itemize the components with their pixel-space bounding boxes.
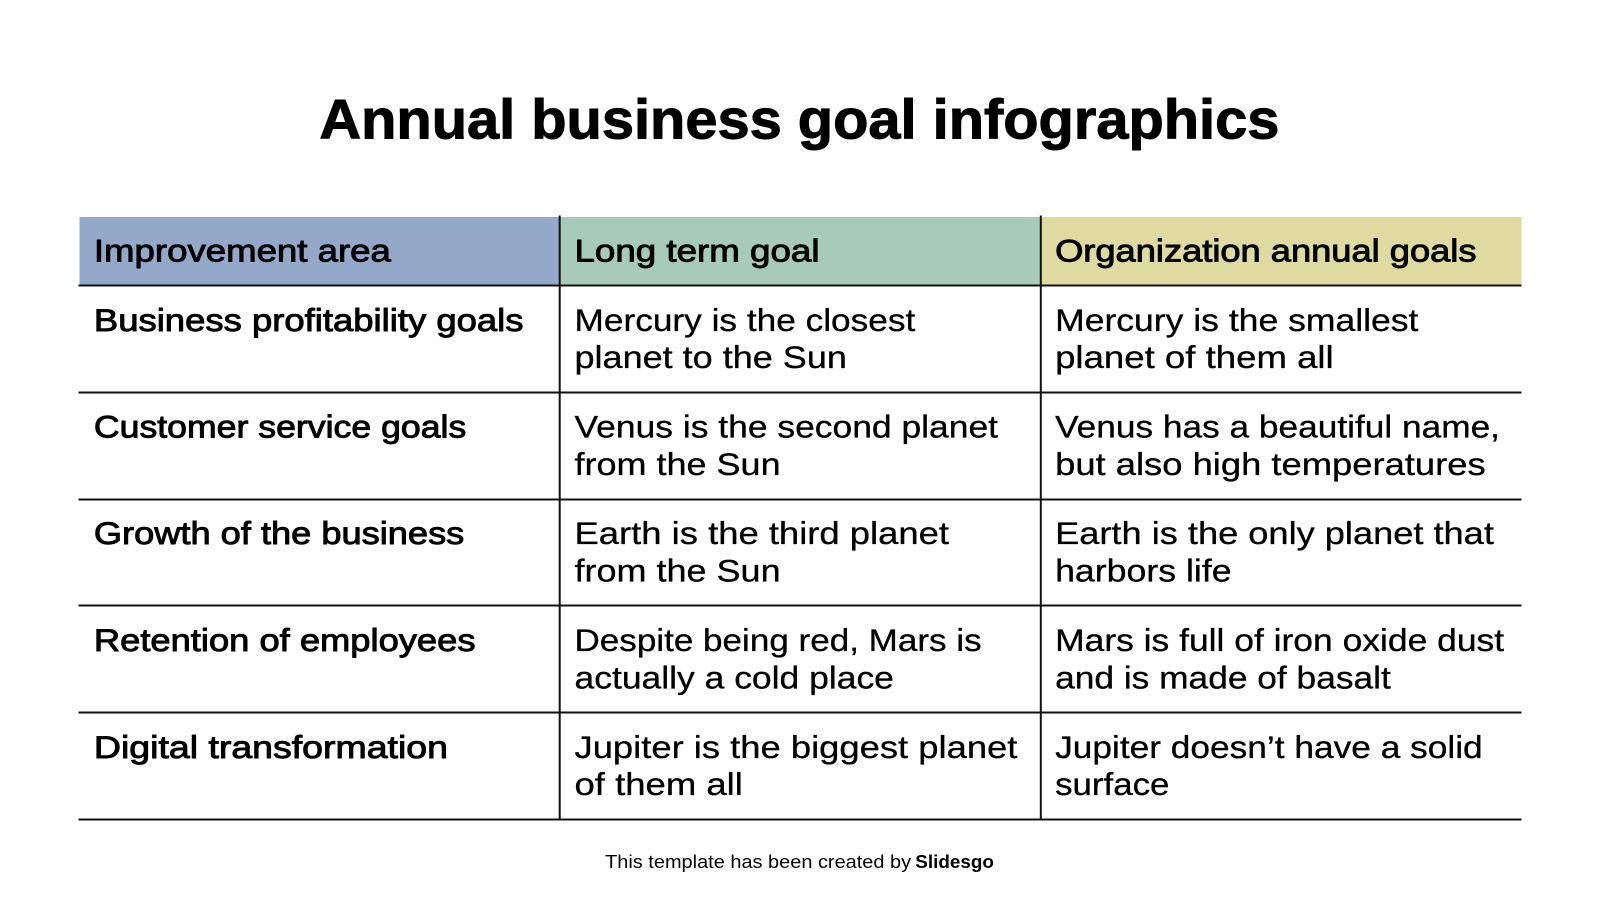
header cell: organization annual goals: Organization annual goals (1055, 233, 1476, 269)
row: customer service goals: Venus is the second planet (574, 409, 998, 445)
row: retention of employees: Retention of employees (94, 622, 476, 658)
row: business profitability goals: planet to the Sun (574, 339, 847, 375)
header cell: long term goal (560, 217, 1041, 285)
row: business profitability goals: planet of them all (1055, 339, 1334, 375)
row: business profitability goals (94, 302, 1419, 375)
header cell: organization annual goals (1041, 217, 1522, 285)
row: growth of the business: Earth is the third planet (574, 515, 949, 551)
row: business profitability goals: Business profitability goals (94, 302, 524, 338)
row: retention of employees (94, 622, 1504, 695)
row: customer service goals: Venus has a beautiful name, (1055, 409, 1500, 445)
row: customer service goals: but also high temperatures (1055, 446, 1486, 482)
row: customer service goals: Customer service goals (94, 409, 466, 445)
header cell: improvement area (80, 217, 560, 285)
header row (80, 217, 1522, 285)
table (78, 216, 1522, 820)
row: digital transformation: Digital transformation (94, 729, 448, 765)
row: growth of the business (94, 515, 1494, 588)
row: digital transformation: Jupiter doesn’t have a solid (1055, 729, 1483, 765)
row: digital transformation: Jupiter is the biggest planet (574, 729, 1018, 765)
row: retention of employees: and is made of basalt (1055, 659, 1391, 695)
row: customer service goals (94, 409, 1500, 482)
header cell: improvement area: Improvement area (94, 233, 391, 269)
row: growth of the business: from the Sun (574, 552, 781, 588)
row: growth of the business: Earth is the only planet that (1055, 515, 1494, 551)
row: growth of the business: Growth of the business (94, 515, 464, 551)
row: digital transformation: surface (1055, 766, 1169, 802)
row: digital transformation (94, 729, 1483, 802)
row: business profitability goals: Mercury is the smallest (1055, 302, 1419, 338)
header cell: long term goal: Long term goal (574, 233, 820, 269)
row: growth of the business: harbors life (1055, 552, 1232, 588)
footer credit: This template has been created by (605, 852, 911, 872)
row: digital transformation: of them all (574, 766, 743, 802)
row: retention of employees: Despite being red, Mars is (574, 622, 982, 658)
row: business profitability goals: Mercury is the closest (574, 302, 916, 338)
row: retention of employees: Mars is full of iron oxide dust (1055, 622, 1504, 658)
title: Annual business goal infographics (319, 87, 1279, 150)
footer credit: Slidesgo (915, 852, 994, 872)
row: customer service goals: from the Sun (574, 446, 781, 482)
row: retention of employees: actually a cold place (574, 659, 894, 695)
